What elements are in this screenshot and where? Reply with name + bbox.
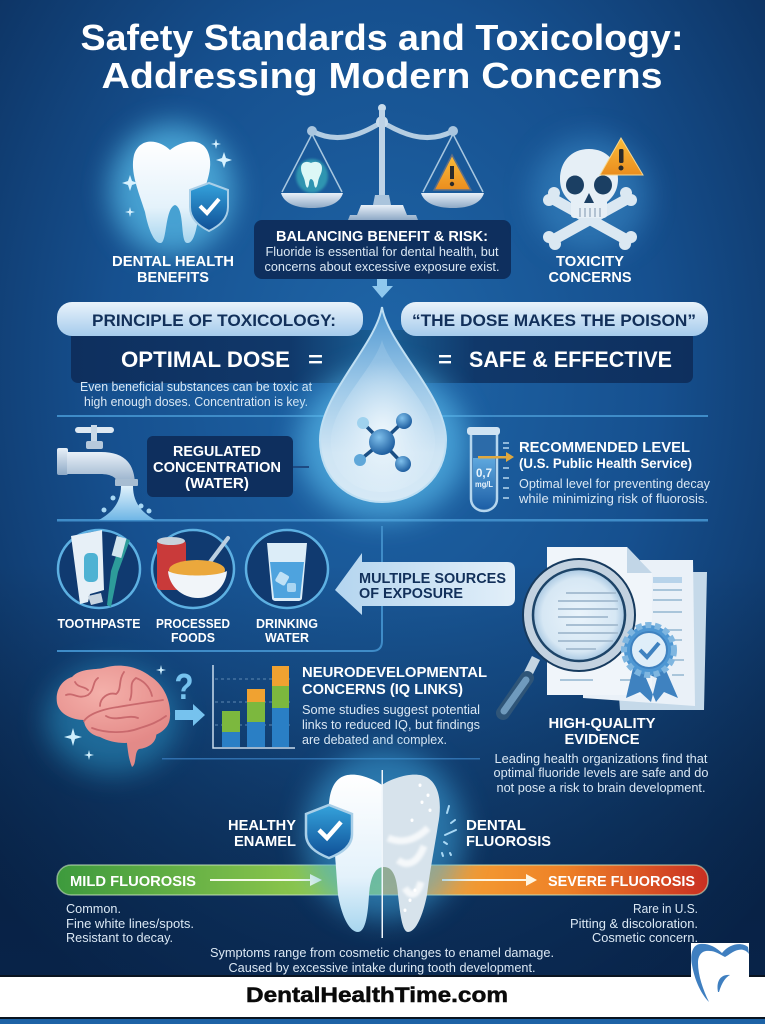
text: high-quality evidence: Leading health organizations find that: [494, 751, 708, 766]
panel: balancing benefit and risk: BALANCING BENEFIT & RISK:: [276, 228, 488, 245]
icon: footer tooth logo: [691, 943, 749, 1002]
text: high-quality evidence: HIGH-QUALITY: [548, 715, 656, 732]
icon: brain with question mark: ?: [174, 666, 194, 707]
bar: fluorosis severity scale: SEVERE FLUOROSIS: [548, 873, 695, 890]
text: high-quality evidence: optimal fluoride levels are safe and do: [494, 765, 708, 780]
heading pill: the dose makes the poison: [401, 302, 708, 336]
label: dental fluorosis: FLUOROSIS: [466, 833, 551, 850]
icon: brain with question mark: [46, 665, 205, 774]
panel: optimal dose equals safe and effective: OPTIMAL DOSE: [121, 347, 290, 372]
title: Safety Standards and Toxicology:: [80, 17, 684, 58]
arrow: multiple sources of exposure: MULTIPLE SOURCES: [359, 570, 506, 587]
icon: glowing tooth with shield: [110, 124, 234, 256]
text: neurodevelopmental concerns: Some studies suggest potential: [302, 702, 480, 717]
bar: fluorosis severity scale: [57, 865, 708, 895]
label: dental health benefits: [112, 253, 234, 286]
label: healthy enamel: ENAMEL: [234, 833, 296, 850]
text: mild fluorosis details: [66, 901, 194, 945]
label: healthy enamel: HEALTHY: [228, 817, 296, 834]
text: high-quality evidence: [494, 715, 708, 795]
icon: magnifier over documents with ribbon: [503, 547, 707, 713]
icon: water drop with molecule: [298, 307, 468, 520]
text: mild fluorosis details: Common.: [66, 901, 121, 916]
text: recommended level: (U.S. Public Health Service): [519, 455, 692, 471]
panel: balancing benefit and risk: [254, 220, 511, 279]
panel: optimal dose equals safe and effective: SAFE & EFFECTIVE: [469, 347, 672, 372]
text: mild fluorosis details: Fine white lines/spots.: [66, 916, 194, 931]
label: dental fluorosis: DENTAL: [466, 817, 526, 834]
icon: toothpaste and toothbrush: [58, 530, 140, 608]
labels: exposure sources: WATER: [265, 630, 310, 645]
text: neurodevelopmental concerns: CONCERNS (IQ LINKS): [302, 681, 463, 698]
arrow: multiple sources of exposure: [335, 553, 515, 615]
text: concentration note: high enough doses. Concentration is key.: [84, 394, 308, 409]
text: severe fluorosis details: [570, 901, 698, 945]
icon: drinking water glass: [246, 530, 328, 608]
labels: exposure sources: FOODS: [171, 630, 215, 645]
text: mild fluorosis details: Resistant to decay.: [66, 930, 173, 945]
panel: optimal dose equals safe and effective: =: [438, 347, 452, 372]
text: high-quality evidence: EVIDENCE: [564, 731, 640, 748]
footer band with site name: DentalHealthTime.com: [246, 984, 508, 1007]
text: symptoms summary: Symptoms range from cosmetic changes to enamel damage.: [210, 945, 554, 960]
text: concentration note: [80, 379, 312, 409]
label: dental fluorosis: [466, 817, 551, 850]
label: toxicity concerns: TOXICITY: [556, 253, 624, 270]
text: neurodevelopmental concerns: links to reduced IQ, but findings: [302, 717, 480, 732]
panel: regulated concentration water: CONCENTRATION: [153, 459, 281, 476]
text: high-quality evidence: not pose a risk to brain development.: [496, 780, 706, 795]
footer band with site name: [0, 975, 765, 1024]
icon: processed foods: [152, 530, 234, 608]
label: dental health benefits: BENEFITS: [137, 269, 209, 286]
text: concentration note: Even beneficial substances can be toxic at: [80, 379, 312, 394]
icon: test tube 0.7 mg/L: 0,7: [476, 466, 492, 480]
panel: regulated concentration water: REGULATED: [173, 443, 261, 460]
arrow: down to drop: [372, 279, 393, 298]
text: severe fluorosis details: Rare in U.S.: [633, 901, 698, 916]
panel: regulated concentration water: [147, 436, 309, 497]
icon: balance scale: [281, 104, 484, 220]
label: toxicity concerns: CONCERNS: [548, 269, 632, 286]
icon: test tube 0.7 mg/L: mg/L: [475, 480, 493, 489]
text: neurodevelopmental concerns: NEURODEVELOPMENTAL: [302, 664, 487, 681]
text: recommended level: Optimal level for preventing decay: [519, 476, 710, 491]
labels: exposure sources: DRINKING: [256, 616, 318, 631]
heading pill: principle of toxicology: PRINCIPLE OF TOXICOLOGY:: [92, 311, 336, 330]
chart: rising bars: [213, 665, 295, 748]
arrow: multiple sources of exposure: OF EXPOSURE: [359, 585, 463, 602]
heading pill: principle of toxicology: [57, 302, 363, 336]
labels: exposure sources: TOOTHPASTE: [58, 616, 141, 631]
labels: exposure sources: PROCESSED: [156, 616, 230, 631]
text: symptoms summary: Caused by excessive intake during tooth development.: [228, 960, 536, 975]
icon: healthy versus fluorosis tooth: [304, 750, 464, 938]
panel: balancing benefit and risk: concerns about excessive exposure exist.: [264, 259, 500, 274]
heading pill: the dose makes the poison: “THE DOSE MAKES THE POISON”: [412, 311, 696, 330]
icon: water faucet: [57, 425, 155, 520]
label: toxicity concerns: [548, 253, 632, 286]
panel: optimal dose equals safe and effective: =: [308, 347, 323, 372]
icon: skull and crossbones with warning: [532, 137, 648, 253]
text: recommended level: RECOMMENDED LEVEL: [519, 439, 690, 456]
panel: balancing benefit and risk: Fluoride is essential for dental health, but: [266, 244, 499, 259]
panel: optimal dose equals safe and effective: [71, 330, 693, 383]
label: healthy enamel: [228, 817, 296, 850]
labels: exposure sources: [58, 616, 318, 645]
title: Addressing Modern Concerns: [102, 55, 662, 96]
text: recommended level: while minimizing risk of fluorosis.: [518, 491, 708, 506]
title: [80, 17, 684, 96]
text: recommended level: [518, 439, 710, 506]
panel: regulated concentration water: (WATER): [185, 475, 249, 492]
label: dental health benefits: DENTAL HEALTH: [112, 253, 234, 270]
text: severe fluorosis details: Cosmetic concern.: [592, 930, 698, 945]
bar: fluorosis severity scale: MILD FLUOROSIS: [70, 873, 196, 890]
text: neurodevelopmental concerns: are debated and complex.: [302, 732, 447, 747]
text: neurodevelopmental concerns: [302, 664, 487, 747]
icon: test tube 0.7 mg/L: [467, 427, 514, 511]
text: symptoms summary: [210, 945, 554, 975]
text: severe fluorosis details: Pitting & discoloration.: [570, 916, 698, 931]
